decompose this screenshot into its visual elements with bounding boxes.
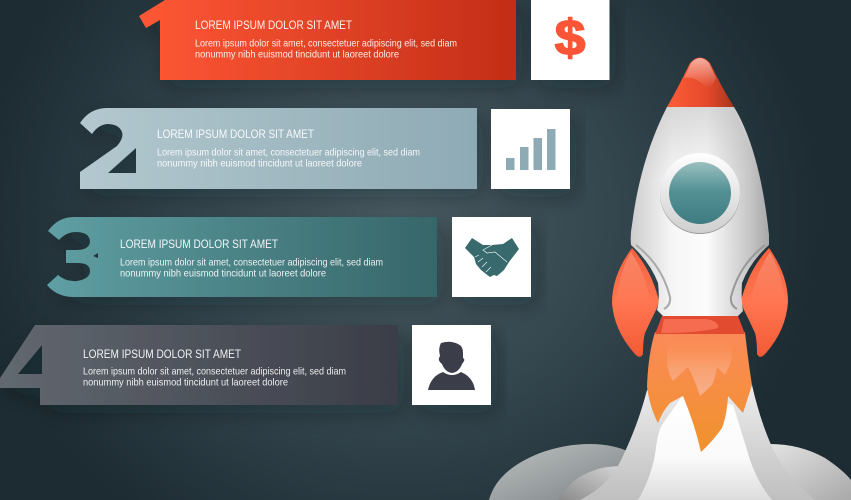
panel: step 4 banner <box>0 325 398 405</box>
icon: person <box>428 342 475 390</box>
small left smoke cloud <box>559 466 625 500</box>
nose highlight <box>684 58 716 88</box>
step 2 body text: nonummy nibh euismod tincidunt ut laoreet dolore <box>157 158 362 170</box>
left fin groove <box>636 245 670 309</box>
step 3 body text: nonummy nibh euismod tincidunt ut laoreet dolore <box>120 268 326 280</box>
left fin highlight <box>616 252 650 305</box>
number 1 banner shape <box>139 0 516 80</box>
rocket flame <box>647 332 752 452</box>
panel: step 3 icon tile <box>452 217 531 297</box>
right fin groove <box>731 245 765 309</box>
step 1 body text <box>195 38 457 60</box>
step 2 body text <box>157 148 420 170</box>
big left smoke cloud <box>489 444 630 500</box>
icon: handshake <box>465 238 519 277</box>
panel: step 2 icon tile <box>491 109 570 189</box>
porthole ring <box>660 154 740 234</box>
right fin <box>741 248 788 357</box>
illustration: rocket launch <box>489 58 851 500</box>
panel: step 1 banner <box>139 0 516 80</box>
step 4 body text: nonummy nibh euismod tincidunt ut laoreet dolore <box>83 378 288 388</box>
right fin highlight <box>751 252 785 305</box>
step 4 heading: LOREM IPSUM DOLOR SIT AMET <box>83 348 241 361</box>
panel: step 2 banner <box>80 108 477 189</box>
nose cone <box>667 58 734 107</box>
step 4 body text: Lorem ipsum dolor sit amet, consectetuer adipiscing elit, sed diam <box>83 366 346 378</box>
number 3 banner shape <box>47 217 437 297</box>
panel: step 4 icon tile <box>412 325 491 405</box>
rocket body <box>631 107 769 317</box>
upper body shading <box>640 107 760 180</box>
big right smoke cloud <box>760 444 851 500</box>
icon: bar chart <box>506 129 556 170</box>
step 1 heading: LOREM IPSUM DOLOR SIT AMET <box>195 19 352 32</box>
step 1 body text: nonummy nibh euismod tincidunt ut laoreet dolore <box>195 50 399 60</box>
step 3 body text: Lorem ipsum dolor sit amet, consectetuer adipiscing elit, sed diam <box>120 258 383 268</box>
inner flame <box>667 338 732 396</box>
step 2 body text: Lorem ipsum dolor sit amet, consectetuer adipiscing elit, sed diam <box>157 148 420 158</box>
panel: step 1 icon tile <box>531 0 610 80</box>
number 4 banner shape <box>0 325 398 405</box>
smoke column <box>580 385 815 500</box>
step 3 body text <box>120 258 383 280</box>
step 4 body text <box>83 366 346 388</box>
icon: dollar sign: $ <box>555 10 585 66</box>
panel: step 3 banner <box>47 217 437 297</box>
collar <box>655 316 745 334</box>
step 1 body text: Lorem ipsum dolor sit amet, consectetuer adipiscing elit, sed diam <box>195 38 457 50</box>
left fin <box>612 248 659 357</box>
collar highlight <box>661 319 718 333</box>
step 2 heading: LOREM IPSUM DOLOR SIT AMET <box>157 128 314 141</box>
porthole glass <box>669 162 731 224</box>
step 3 heading: LOREM IPSUM DOLOR SIT AMET <box>120 238 278 251</box>
number 2 banner shape <box>80 108 477 189</box>
inner smoke column <box>638 395 772 500</box>
